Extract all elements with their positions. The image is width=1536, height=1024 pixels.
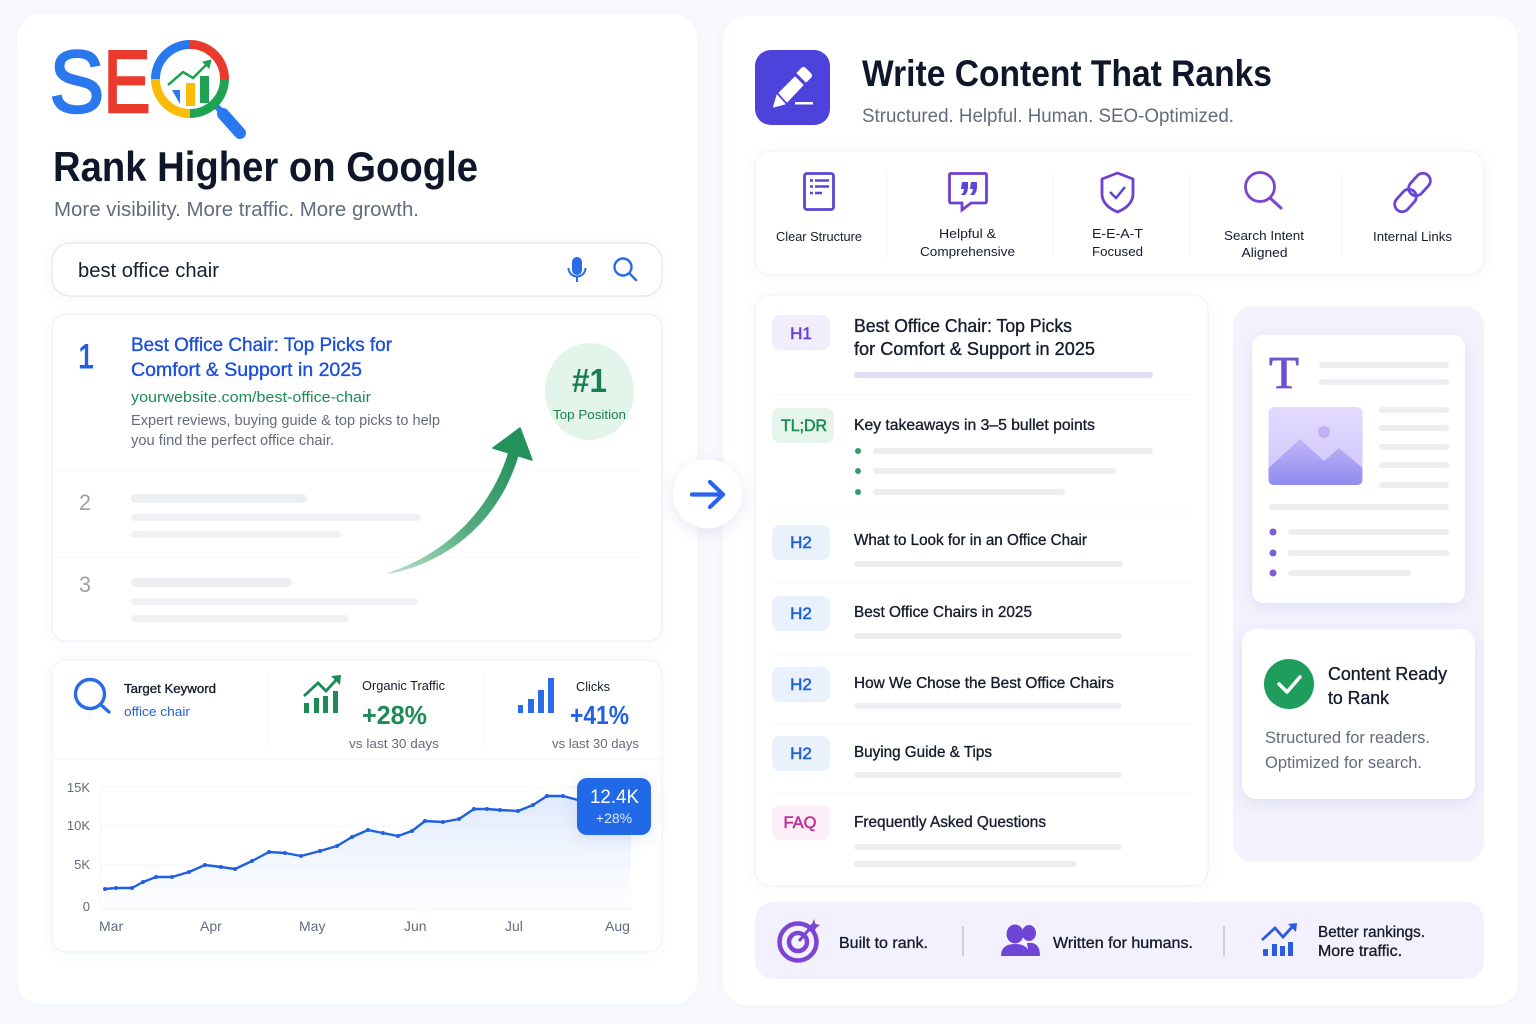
item: clear structure <box>776 174 862 244</box>
item: search intent aligned: Aligned <box>1242 245 1288 260</box>
text: better rankings <box>1318 924 1425 960</box>
item: internal links: Internal Links <box>1373 229 1453 244</box>
SEO logo: E <box>104 32 150 131</box>
callout: content ready to rank: Content Ready <box>1328 663 1448 684</box>
arrow: rising rank <box>388 428 532 574</box>
panel: rank higher on Google <box>17 14 697 1004</box>
panel: page preview column <box>1233 306 1484 862</box>
metric: target keyword: Target Keyword <box>124 681 216 696</box>
chart: traffic line: 15K <box>67 780 90 795</box>
chart: traffic line: 5K <box>74 857 90 872</box>
result 1: Best Office Chair: Top Picks for <box>131 334 392 356</box>
search box: best office chair <box>78 260 219 282</box>
chart: traffic line: May <box>299 918 325 934</box>
item: E-E-A-T focused: Focused <box>1092 244 1143 259</box>
metric: clicks <box>518 678 639 751</box>
document preview: T <box>1269 347 1299 398</box>
metric: clicks: +41% <box>570 700 629 730</box>
row: FAQ: Frequently Asked Questions <box>854 814 1046 831</box>
badge: top position <box>545 343 634 440</box>
chart: traffic line <box>67 778 651 934</box>
row: H2 what to look for: What to Look for in an Office Chair <box>854 532 1088 549</box>
row: H1: for Comfort & Support in 2025 <box>854 339 1095 359</box>
result 2 placeholder: 2 <box>79 490 91 515</box>
row: H1: Best Office Chair: Top Picks <box>854 316 1072 336</box>
row: H2 buying guide <box>772 736 1122 778</box>
title: Write Content That Ranks <box>862 53 1272 94</box>
row: TL;DR: Key takeaways in 3–5 bullet points <box>854 417 1095 434</box>
metric: clicks: vs last 30 days <box>552 736 639 751</box>
result 2 placeholder <box>79 490 421 538</box>
row: H2 how we chose: How We Chose the Best Office Chairs <box>854 675 1114 692</box>
chart: traffic line: Mar <box>99 918 123 934</box>
icon: traffic chart <box>304 675 341 713</box>
row: H2 best chairs: Best Office Chairs in 2025 <box>854 604 1032 621</box>
callout: content ready to rank: to Rank <box>1328 687 1390 708</box>
SEO logo: S <box>50 32 104 131</box>
result 1 <box>78 334 440 449</box>
document preview <box>1252 335 1465 603</box>
SEO logo <box>50 32 240 133</box>
metric: target keyword: office chair <box>124 704 191 719</box>
result 1: yourwebsite.com/best-office-chair <box>131 389 371 406</box>
callout: content ready to rank <box>1242 629 1475 799</box>
result 1: you find the perfect office chair. <box>131 433 334 449</box>
row: FAQ: FAQ <box>784 813 816 832</box>
result 3 placeholder: 3 <box>79 572 91 597</box>
arrow: connector <box>673 460 742 528</box>
chart: traffic line: Aug <box>605 918 630 934</box>
row: H1: H1 <box>790 324 812 343</box>
row: H2 best chairs: H2 <box>790 604 812 623</box>
chart: traffic line: Jun <box>404 918 427 934</box>
item: clear structure: Clear Structure <box>776 229 862 244</box>
icon: target <box>780 919 820 960</box>
callout: 12.4K: 12.4K <box>590 786 639 808</box>
row: H1 <box>772 315 1153 378</box>
panel: write content that ranks <box>723 16 1518 1005</box>
result 1: Comfort & Support in 2025 <box>131 359 362 381</box>
panel: search results <box>52 314 662 641</box>
panel: content qualities <box>755 151 1484 275</box>
callout: content ready to rank: Structured for readers. <box>1265 729 1430 747</box>
subheading: More visibility. More traffic. More growth. <box>54 199 419 221</box>
item: helpful and comprehensive: Helpful & <box>939 226 996 241</box>
callout: 12.4K: +28% <box>596 810 632 826</box>
panel: content outline <box>755 295 1208 886</box>
metric: organic traffic: vs last 30 days <box>349 736 440 751</box>
result 3 placeholder <box>79 572 418 622</box>
badge: top position: #1 <box>572 362 607 399</box>
item: helpful and comprehensive: Comprehensive <box>920 244 1015 259</box>
chart: traffic line: Jul <box>505 918 523 934</box>
result 1: 1 <box>78 338 94 376</box>
item: internal links <box>1373 170 1453 244</box>
metric: target keyword <box>76 680 216 719</box>
icon: microphone <box>568 257 586 282</box>
icon: rankings chart <box>1262 923 1297 956</box>
row: H2 buying guide: Buying Guide & Tips <box>854 744 992 761</box>
row: H2 how we chose: H2 <box>790 675 812 694</box>
icon: pencil <box>755 50 830 125</box>
search box <box>52 243 662 296</box>
badge: top position: Top Position <box>553 407 626 422</box>
row: H2 buying guide: H2 <box>790 744 812 763</box>
panel: bottom benefits <box>755 902 1484 979</box>
result 1: Expert reviews, buying guide & top picks to help <box>131 413 440 429</box>
metric: clicks: Clicks <box>576 679 610 694</box>
icon: clicks bars <box>518 678 554 713</box>
text: better rankings: Better rankings. <box>1318 924 1425 941</box>
image placeholder <box>1268 407 1362 485</box>
subtitle: Structured. Helpful. Human. SEO-Optimized. <box>862 106 1234 127</box>
item: search intent aligned <box>1224 172 1304 260</box>
icon: search <box>614 258 636 280</box>
panel: metrics and chart <box>52 660 662 952</box>
item: search intent aligned: Search Intent <box>1224 228 1304 243</box>
row: H2 how we chose <box>772 667 1122 709</box>
heading: Rank Higher on Google <box>53 143 478 190</box>
metric: organic traffic <box>304 675 445 751</box>
row: FAQ <box>772 805 1122 867</box>
item: E-E-A-T focused <box>1092 173 1143 259</box>
icon: people <box>1001 924 1040 956</box>
row: H2 best chairs <box>772 596 1122 639</box>
callout: content ready to rank: Optimized for search. <box>1265 754 1422 772</box>
row: TL;DR: TL;DR <box>781 416 827 435</box>
row: H2 what to look for: H2 <box>790 533 812 552</box>
item: helpful and comprehensive <box>920 174 1015 259</box>
chart: traffic line: Apr <box>200 918 222 934</box>
text: built to rank: Built to rank. <box>839 935 928 952</box>
metric: organic traffic: +28% <box>362 700 427 730</box>
text: better rankings: More traffic. <box>1318 943 1402 960</box>
row: H2 what to look for <box>772 525 1123 567</box>
row: TL;DR <box>772 408 1153 495</box>
chart: traffic line: 10K <box>67 818 90 833</box>
icon: search <box>76 680 109 712</box>
callout: 12.4K <box>577 778 651 835</box>
metric: organic traffic: Organic Traffic <box>362 678 445 693</box>
chart: traffic line: 0 <box>83 899 90 914</box>
text: written for humans: Written for humans. <box>1053 935 1193 952</box>
item: E-E-A-T focused: E-E-A-T <box>1092 226 1143 241</box>
